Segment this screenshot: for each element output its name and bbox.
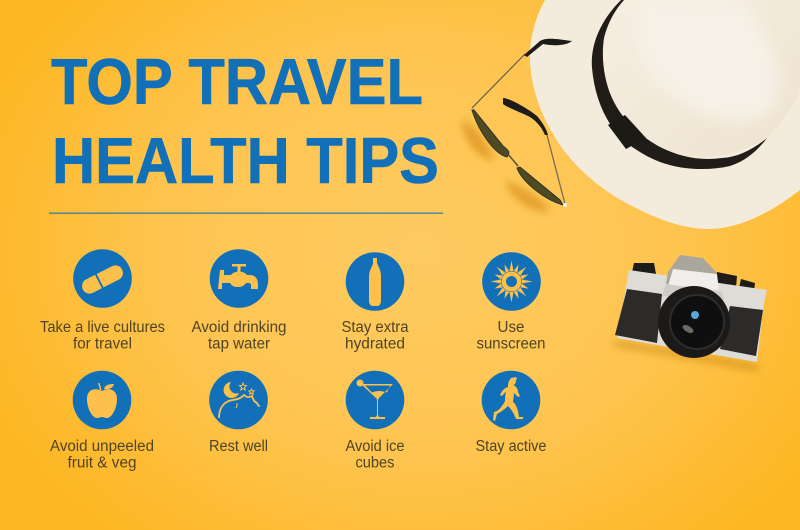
tip: ice cubes bbox=[346, 371, 404, 472]
label bbox=[50, 438, 154, 472]
camera front plate bbox=[662, 284, 724, 300]
icon: runner bbox=[482, 371, 540, 429]
camera shadow bbox=[612, 340, 760, 372]
tip: rest well bbox=[209, 371, 268, 455]
hinge tip bbox=[563, 203, 567, 207]
title bbox=[51, 45, 439, 197]
lens glint bbox=[691, 311, 699, 319]
icon: sun bbox=[482, 252, 541, 311]
temple arm two bbox=[547, 135, 565, 204]
label: cubes bbox=[356, 454, 395, 472]
title: HEALTH TIPS bbox=[52, 124, 439, 197]
icon: bottle bbox=[346, 252, 404, 311]
lens shadows bbox=[462, 120, 550, 212]
label: hydrated bbox=[345, 336, 405, 352]
icon: sleeping head and moon bbox=[209, 371, 268, 429]
tip: unpeeled fruit bbox=[50, 371, 154, 472]
title: TOP TRAVEL bbox=[51, 45, 423, 118]
camera dials bbox=[632, 263, 755, 292]
right lens bbox=[517, 167, 563, 205]
tip: live cultures bbox=[40, 249, 165, 352]
hat crown bbox=[603, 0, 800, 157]
label: for travel bbox=[73, 336, 132, 352]
label: Stay extra bbox=[342, 319, 409, 336]
label bbox=[476, 319, 546, 352]
label bbox=[40, 319, 165, 352]
photo: straw hat bbox=[530, 0, 800, 229]
tip: sunscreen bbox=[476, 252, 546, 352]
label: Take a live cultures bbox=[40, 319, 165, 336]
camera leather right bbox=[720, 306, 763, 356]
label bbox=[192, 319, 286, 352]
camera body bbox=[617, 270, 767, 362]
camera prism bbox=[666, 255, 719, 290]
label bbox=[346, 438, 404, 472]
hat crown highlight bbox=[636, 0, 779, 122]
hat band bow bbox=[608, 115, 646, 149]
label bbox=[342, 319, 409, 352]
bridge bbox=[507, 153, 518, 166]
photo: camera bbox=[612, 255, 767, 372]
label: sunscreen bbox=[476, 336, 546, 352]
label: Avoid unpeeled bbox=[50, 438, 154, 455]
tip: stay active bbox=[476, 371, 546, 455]
icon: apple bbox=[73, 371, 131, 429]
hat band bbox=[592, 0, 767, 169]
camera lens bbox=[658, 286, 730, 358]
temple arm one bbox=[472, 54, 525, 108]
label: Rest well bbox=[209, 438, 268, 455]
label: fruit & veg bbox=[68, 454, 136, 472]
photo: sunglasses bbox=[462, 39, 572, 212]
hat brim bbox=[530, 0, 800, 229]
label: Use bbox=[498, 319, 524, 336]
label: Avoid ice bbox=[346, 438, 404, 455]
tip: tap water bbox=[192, 249, 286, 352]
camera leather left bbox=[615, 289, 662, 343]
icon: tap bbox=[210, 249, 268, 308]
left lens bbox=[472, 110, 509, 157]
tip: hydrated bbox=[342, 252, 409, 352]
label: Avoid drinking bbox=[192, 319, 286, 336]
label: tap water bbox=[208, 336, 270, 352]
icon: pill bbox=[73, 249, 132, 308]
label: Stay active bbox=[476, 438, 546, 455]
icon: cocktail glass bbox=[346, 371, 404, 429]
title divider bbox=[49, 212, 443, 214]
